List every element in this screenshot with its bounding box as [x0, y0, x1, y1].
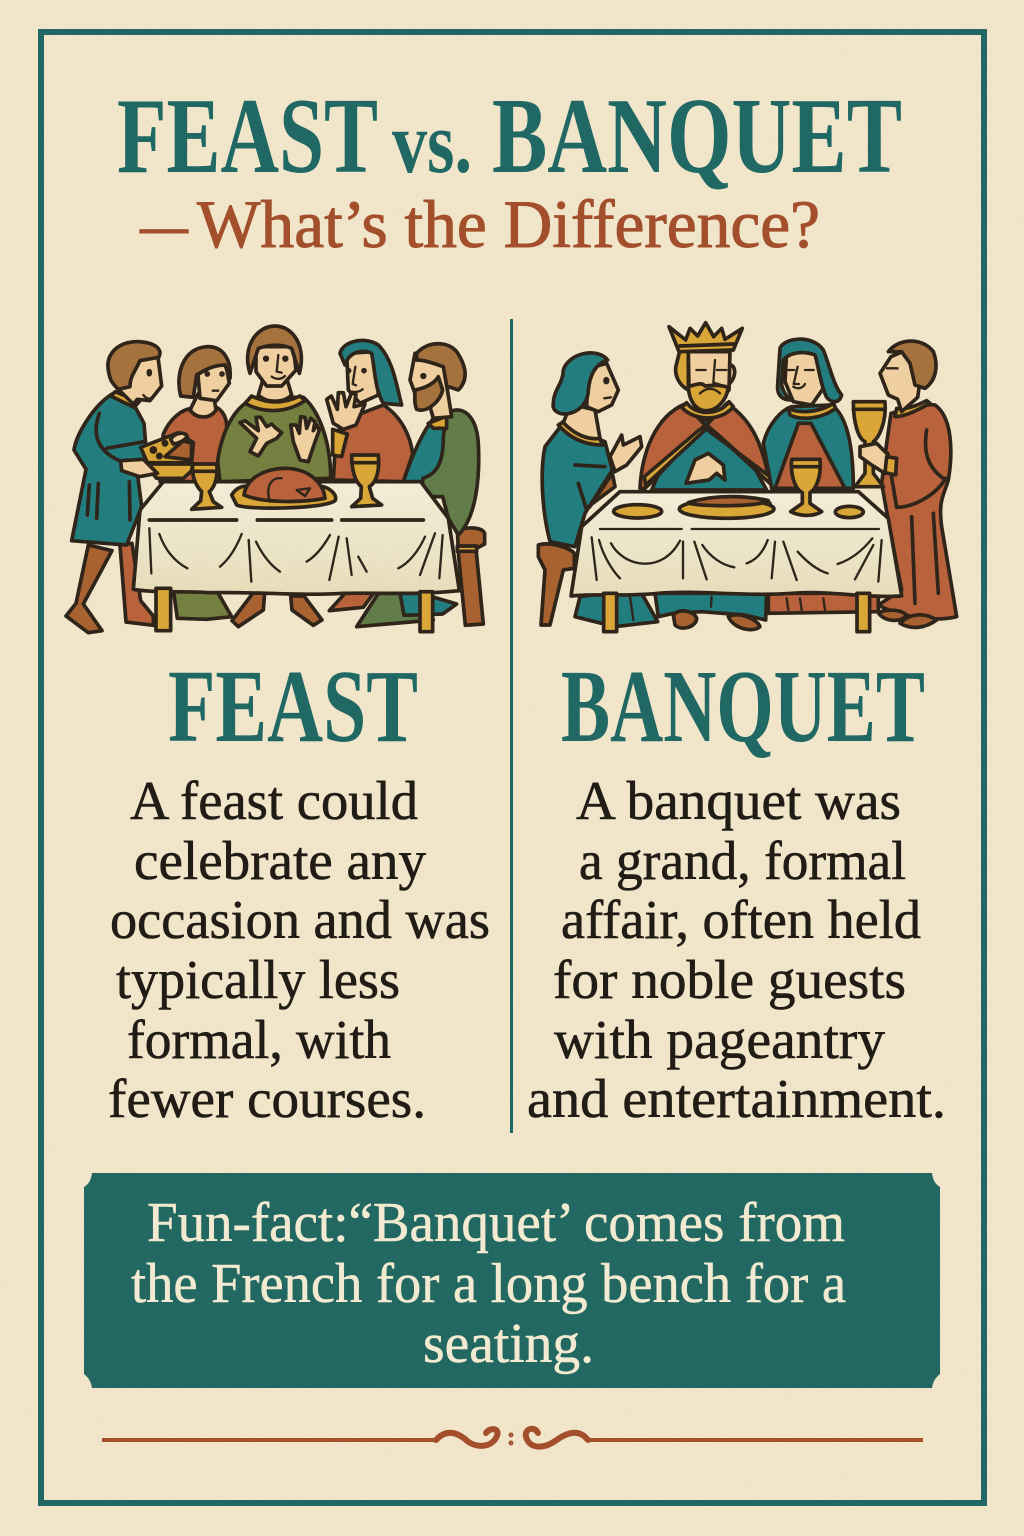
- goblets: [192, 455, 382, 509]
- turkey on platter: [232, 468, 336, 508]
- fun fact panel: [84, 1173, 940, 1388]
- diner: olive tunic center: [218, 326, 331, 482]
- stool and under-table robes: [538, 544, 878, 630]
- feast description: fewer courses.: [108, 1068, 426, 1129]
- ornamental divider: [102, 1429, 923, 1447]
- fun fact panel: the French for a long bench for a: [131, 1253, 846, 1315]
- feast description: A feast could: [130, 770, 418, 831]
- stool and under-table robes: [173, 528, 485, 627]
- banquet description: affair, often held: [561, 889, 921, 950]
- woman in teal at left: [542, 353, 642, 547]
- plates, platter and goblet: [614, 459, 863, 518]
- diner: rust tunic: [160, 347, 230, 482]
- diner: veiled woman: [327, 340, 413, 482]
- illustration: feast scene: [66, 326, 485, 633]
- title: vs.: [392, 95, 472, 192]
- subtitle: What’s the Difference?: [197, 186, 820, 262]
- illustration: banquet scene: [538, 323, 957, 632]
- banquet description: A banquet was: [576, 770, 901, 831]
- title: FEAST: [117, 77, 378, 196]
- banquet description: with pageantry: [554, 1009, 885, 1070]
- fun fact panel: Fun-fact:“Banquet’ comes from: [147, 1192, 845, 1254]
- diner: bearded man: [387, 344, 479, 535]
- center divider: [510, 319, 513, 1133]
- title: [117, 77, 902, 196]
- banquet description: [527, 770, 946, 1129]
- table with cloth: [571, 492, 902, 632]
- feast description: [108, 770, 490, 1129]
- server in teal tunic with pie: [72, 342, 193, 545]
- banquet description: and entertainment.: [527, 1068, 946, 1129]
- attendant with goblet: [853, 341, 957, 627]
- feast description: formal, with: [127, 1009, 391, 1070]
- subtitle: —: [139, 186, 189, 262]
- fun fact panel: seating.: [423, 1313, 594, 1375]
- heading: feast: FEAST: [168, 649, 418, 764]
- king with crown and cape: [640, 323, 770, 490]
- feast description: celebrate any: [134, 830, 426, 891]
- title: BANQUET: [492, 77, 902, 196]
- feast description: typically less: [116, 949, 400, 1010]
- banquet description: a grand, formal: [579, 830, 906, 891]
- table with cloth: [133, 482, 459, 632]
- feast description: occasion and was: [110, 889, 490, 950]
- veiled noblewoman: [763, 339, 853, 488]
- banquet description: for noble guests: [553, 949, 906, 1010]
- server legs: [66, 543, 153, 633]
